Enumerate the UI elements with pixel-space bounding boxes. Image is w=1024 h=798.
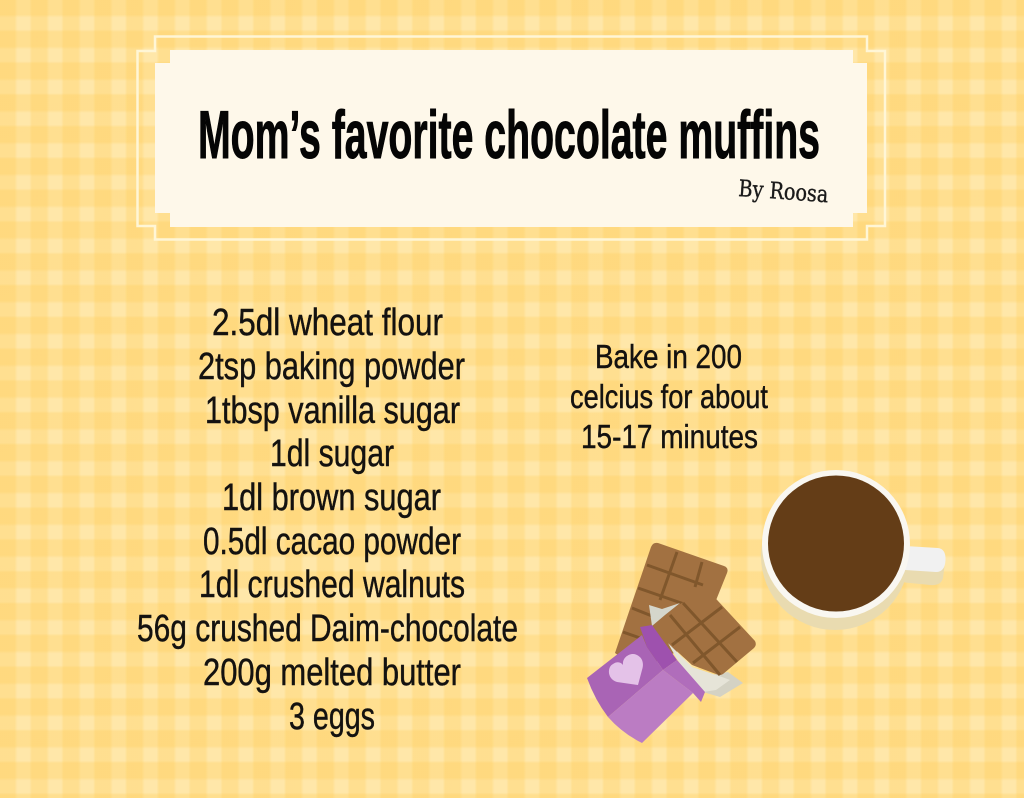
wrapper light panel [608, 670, 693, 743]
lower foil [668, 643, 743, 697]
back chocolate piece [615, 543, 728, 670]
banner outline [138, 36, 885, 240]
ingredients list: 2.5dl wheat flour [212, 302, 443, 344]
banner fill [155, 50, 867, 227]
ingredients list [137, 302, 518, 738]
wrapper medium panel [587, 635, 663, 717]
byline: By Roosa [738, 176, 829, 208]
ingredients list: 1tbsp vanilla sugar [205, 390, 460, 432]
torn foil [649, 603, 680, 626]
wrapper [587, 625, 705, 743]
wrapper heart [609, 654, 643, 685]
coffee [768, 476, 904, 612]
baking instructions [570, 338, 768, 455]
panel: title banner [138, 36, 885, 240]
ingredients list: 1dl brown sugar [222, 477, 441, 519]
cup shadow [761, 482, 945, 630]
baking instructions: celcius for about [570, 378, 768, 415]
cup handle [905, 546, 946, 572]
ingredients list: 2tsp baking powder [198, 346, 465, 388]
ingredients list: 200g melted butter [203, 652, 461, 694]
icon: coffee cup [761, 470, 946, 630]
ingredients list: 56g crushed Daim-chocolate [137, 608, 518, 650]
wrapper upper cuff [640, 625, 677, 670]
ingredients list: 1dl crushed walnuts [199, 564, 465, 606]
ingredients list: 3 eggs [289, 696, 375, 738]
baking instructions: 15-17 minutes [581, 418, 758, 455]
ingredients list: 0.5dl cacao powder [203, 521, 461, 563]
ingredients list: 1dl sugar [270, 433, 394, 475]
wrapper lower cuff [663, 660, 705, 702]
icon: chocolate bar [587, 543, 756, 743]
baking instructions: Bake in 200 [595, 338, 742, 375]
front chocolate piece [652, 586, 756, 675]
cup rim [762, 470, 910, 618]
